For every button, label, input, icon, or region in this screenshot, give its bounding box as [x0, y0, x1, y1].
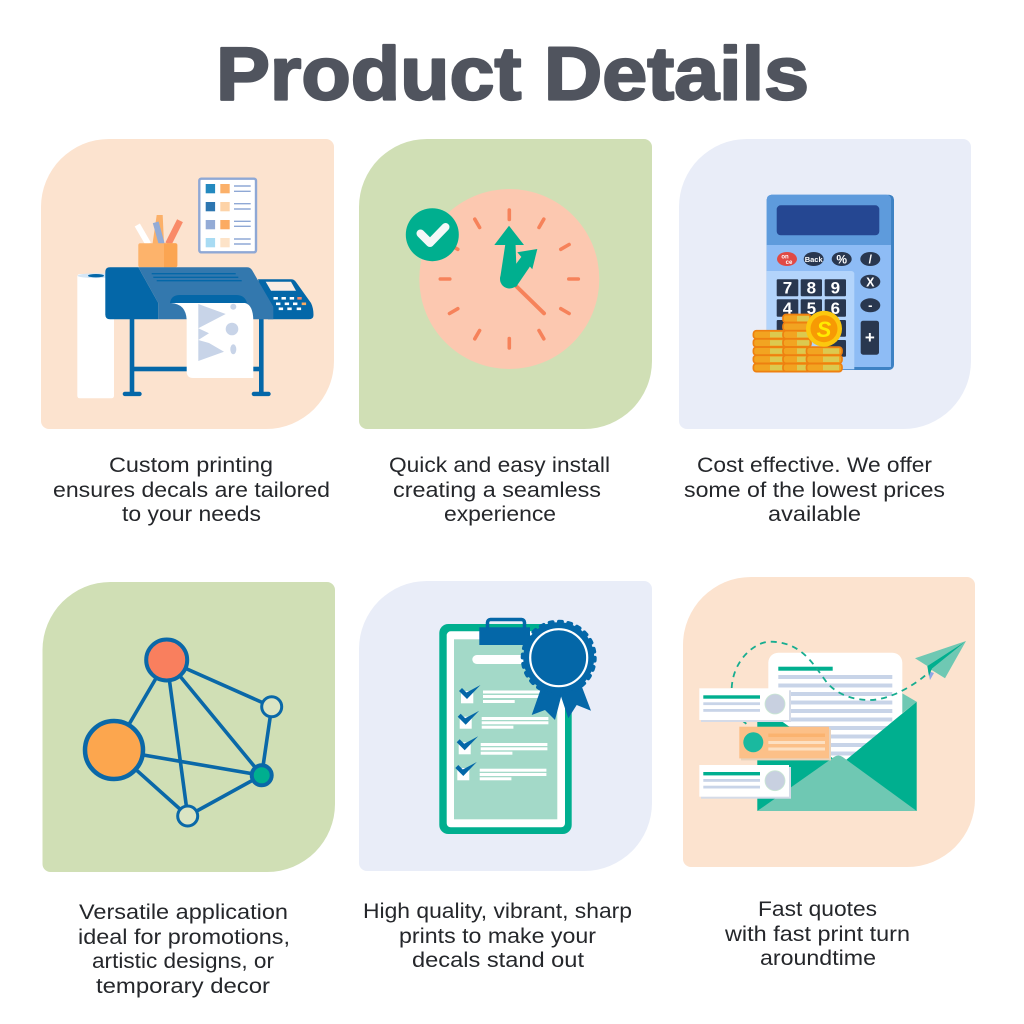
caption: versatile application: ideal for promotions,	[78, 926, 290, 949]
icon: calculator: 7	[783, 278, 792, 298]
icon: calculator: 8	[807, 278, 816, 298]
caption: cost effective: Cost effective. We offer	[697, 454, 932, 477]
panel background	[41, 139, 334, 429]
icon: award rosette	[523, 622, 595, 720]
icon: check badge	[406, 208, 459, 261]
icon: quote card middle	[739, 727, 831, 760]
icon: pens in cup	[137, 215, 180, 267]
caption: high quality	[363, 900, 632, 972]
icon: calculator: -	[868, 298, 872, 312]
caption: high quality: prints to make your	[399, 925, 596, 948]
caption: cost effective: some of the lowest prices	[684, 479, 945, 502]
caption: versatile application: Versatile application	[79, 901, 288, 924]
icon: network diagram	[85, 640, 282, 826]
icon: paper plane	[915, 641, 966, 680]
icon: calculator: 6	[831, 299, 840, 318]
panel background	[359, 581, 652, 871]
caption: fast quotes	[724, 898, 910, 970]
icon: calculator: %	[836, 252, 847, 266]
icon: coin stacks: S	[817, 317, 832, 342]
caption: fast quotes: aroundtime	[760, 947, 876, 970]
caption: fast quotes: with fast print turn	[724, 923, 910, 946]
icon: colour chart	[199, 179, 256, 252]
caption: cost effective: available	[768, 503, 861, 526]
icon: wide format printer	[105, 267, 314, 396]
icon: clock	[419, 189, 599, 369]
icon: calculator: ce	[786, 260, 793, 266]
icon: paper roll	[77, 273, 114, 398]
icon: quote card top	[699, 688, 791, 722]
caption: fast quotes: Fast quotes	[758, 898, 877, 921]
caption: custom printing	[53, 454, 330, 526]
panel: versatile application	[42, 582, 335, 872]
caption: versatile application	[78, 901, 290, 998]
icon: calculator: /	[869, 252, 873, 266]
caption: custom printing: ensures decals are tailored	[53, 479, 330, 502]
icon: calculator: 4	[783, 299, 793, 318]
icon: envelope with document	[757, 653, 917, 811]
icon: calculator	[767, 195, 894, 370]
panel background	[683, 577, 975, 867]
caption: high quality: decals stand out	[412, 949, 584, 972]
panel: quick install	[359, 139, 652, 429]
icon: dashed flight path	[732, 642, 928, 727]
caption: custom printing: Custom printing	[109, 454, 273, 477]
icon: clipboard checklist	[439, 620, 572, 834]
caption: versatile application: artistic designs, or	[92, 950, 274, 973]
caption: quick install	[389, 454, 610, 526]
caption: custom printing: to your needs	[122, 503, 261, 526]
caption: cost effective	[684, 454, 945, 526]
icon: calculator: 5	[807, 299, 816, 318]
icon: coin stacks	[753, 311, 842, 372]
title: Product Details	[216, 32, 809, 116]
caption: high quality: High quality, vibrant, sharp	[363, 900, 632, 923]
panel background	[679, 139, 971, 429]
panel background	[359, 139, 652, 429]
icon: calculator: Back	[805, 255, 823, 264]
panel: cost effective	[679, 139, 971, 429]
icon: calculator: +	[865, 328, 875, 347]
panel: high quality	[359, 581, 652, 871]
panel: fast quotes	[683, 577, 975, 867]
panel: custom printing	[41, 139, 334, 429]
icon: calculator: 9	[831, 278, 840, 298]
icon: quote card bottom	[699, 765, 791, 799]
panel background	[42, 582, 335, 872]
caption: versatile application: temporary decor	[96, 975, 270, 998]
caption: quick install: Quick and easy install	[389, 454, 610, 477]
icon: calculator: on	[781, 254, 789, 260]
icon: calculator: X	[866, 275, 875, 289]
caption: quick install: experience	[444, 503, 556, 526]
caption: quick install: creating a seamless	[393, 479, 601, 502]
